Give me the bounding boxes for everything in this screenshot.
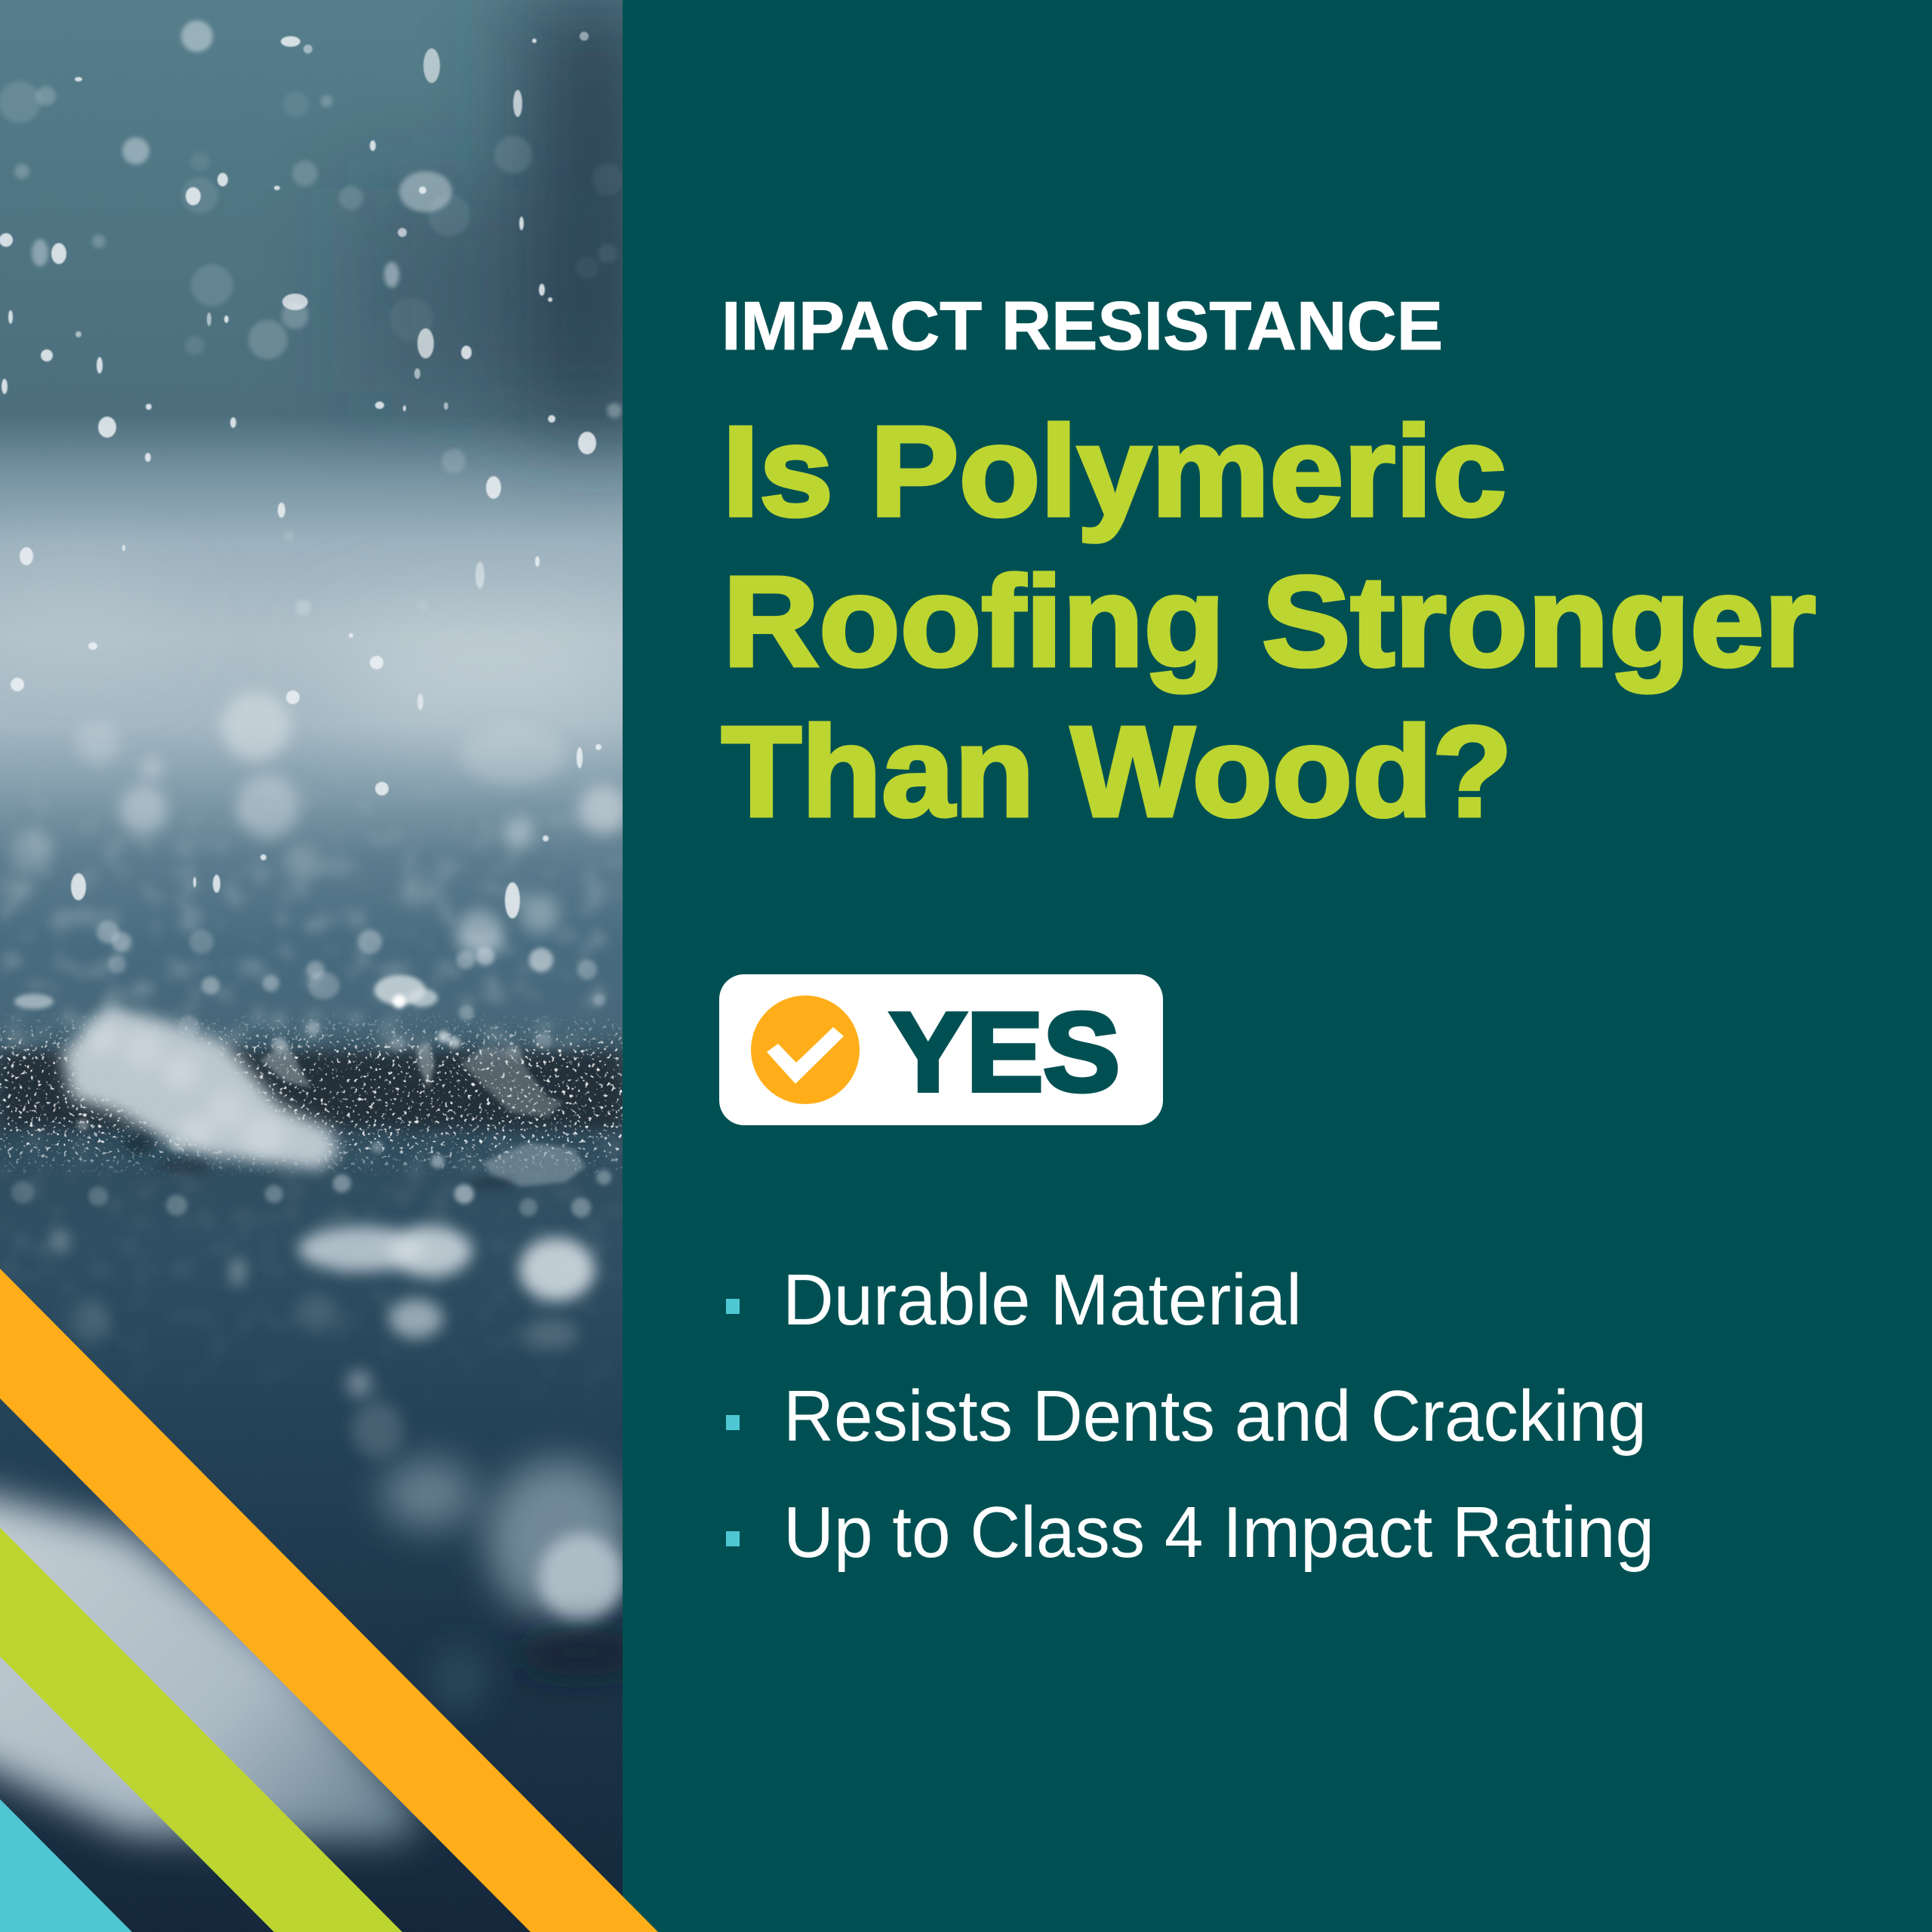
stripe: cyan bbox=[0, 1799, 132, 1932]
splash highlights bbox=[85, 1021, 285, 1157]
sharp falling droplets bbox=[0, 32, 601, 918]
title line 1: Is Polymeric bbox=[722, 400, 1506, 543]
dark shadow lower right bbox=[439, 1630, 649, 1707]
photo: rain droplets on a surface bbox=[0, 0, 657, 1932]
stripe: lime bbox=[0, 1527, 402, 1932]
stripe: orange bbox=[0, 1269, 658, 1932]
bullet item 1: Durable Material bbox=[783, 1260, 1302, 1340]
bullet list bbox=[726, 1260, 1654, 1573]
YES badge bbox=[719, 974, 1163, 1125]
splash crown right bbox=[260, 1041, 586, 1186]
title line 3: Than Wood? bbox=[721, 700, 1512, 844]
large splash blob bbox=[62, 1006, 340, 1170]
soft bokeh mid band bbox=[0, 691, 627, 958]
splash shadows bbox=[123, 1133, 513, 1189]
bullet item 2: Resists Dents and Cracking bbox=[783, 1376, 1647, 1457]
gravel surface band bbox=[0, 1053, 623, 1128]
pale haze mid band bbox=[355, 605, 623, 754]
soft bokeh upper bbox=[0, 20, 623, 615]
title bbox=[721, 400, 1816, 844]
dark haze upper right bbox=[362, 0, 657, 423]
eyebrow heading: IMPACT RESISTANCE bbox=[721, 288, 1443, 365]
lower reflections bbox=[53, 1226, 595, 1457]
film grain bbox=[0, 0, 623, 1932]
YES label: YES bbox=[890, 990, 1120, 1115]
pale streak lower left bbox=[0, 1487, 423, 1841]
lower right bokeh bbox=[382, 1460, 630, 1619]
title line 2: Roofing Stronger bbox=[723, 550, 1816, 694]
sparkle bokeh above surface bbox=[14, 921, 605, 1070]
gravel sparkles bbox=[0, 1011, 623, 1177]
foreground bokeh band bbox=[11, 1118, 611, 1217]
icon: check circle bbox=[751, 995, 860, 1104]
bullet item 3: Up to Class 4 Impact Rating bbox=[783, 1492, 1654, 1573]
mottled water texture bbox=[0, 832, 622, 1272]
badge background bbox=[719, 974, 1163, 1125]
bright bokeh disk bbox=[539, 1534, 623, 1621]
